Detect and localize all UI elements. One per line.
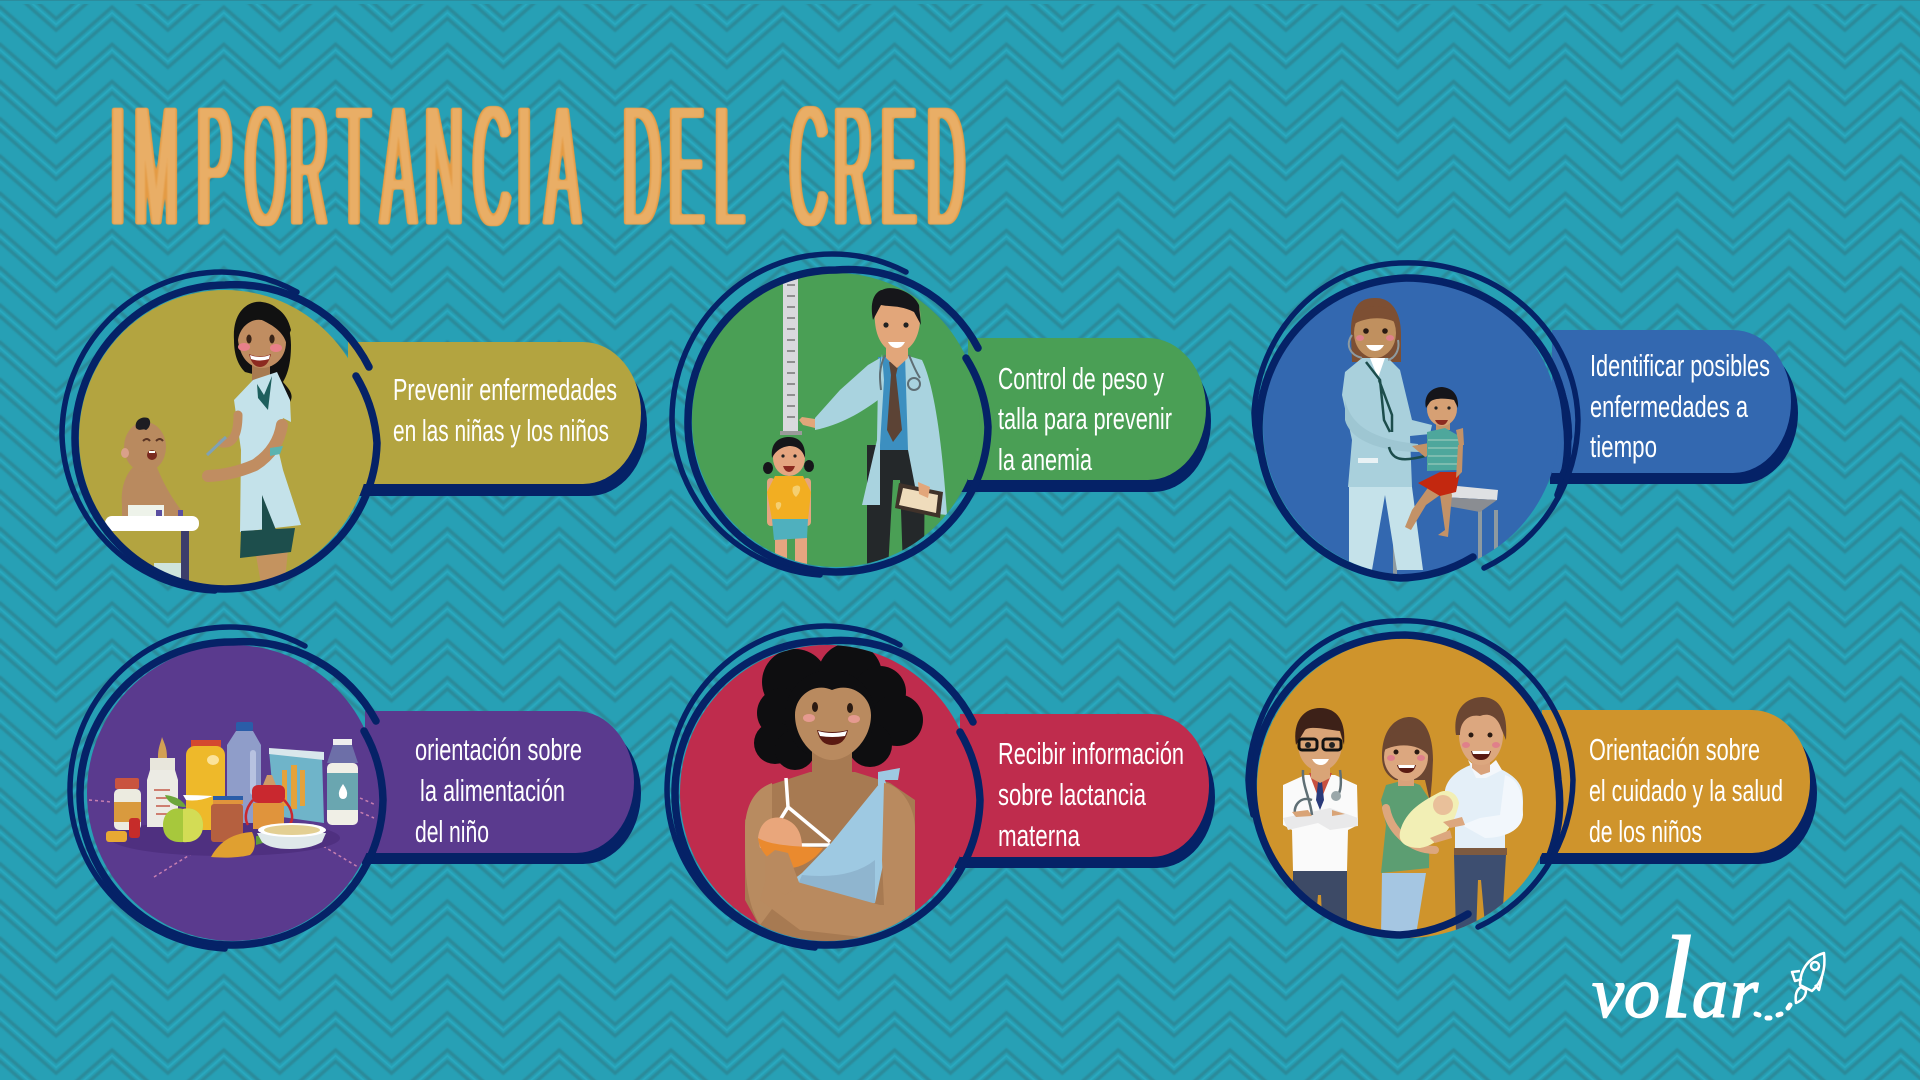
logo wordmark: a [1692, 953, 1728, 1033]
pill shadow [1540, 722, 1817, 864]
panel: orientación sobre el cuidado [1248, 621, 1817, 940]
ring strokes [62, 272, 377, 591]
dotted trail [1756, 1005, 1790, 1018]
illustration: doctor and family with newborn [1283, 697, 1523, 940]
label text: Control de peso y [998, 361, 1164, 396]
illustration: nurse vaccinating baby [105, 302, 301, 590]
icon: rocket [1792, 953, 1824, 1003]
label text: Orientación sobre [1589, 732, 1760, 767]
label text: orientación sobre [415, 732, 582, 767]
ring strokes [667, 626, 980, 948]
label text: la alimentación [420, 773, 565, 808]
pill shadow [955, 726, 1215, 868]
label text: en las niñas y los niños [393, 413, 609, 448]
pill [1542, 710, 1810, 853]
circle background [1257, 638, 1557, 938]
ring strokes [1254, 263, 1578, 578]
label text: materna [998, 818, 1081, 853]
panel: orientación sobre la alimentación [70, 627, 641, 949]
circle background [87, 645, 379, 941]
pill shadow [362, 722, 641, 864]
panel: recibir información sobre lactancia [667, 626, 1215, 948]
pill [365, 711, 634, 853]
label text: Recibir información [998, 736, 1184, 771]
logo wordmark: r [1730, 953, 1759, 1033]
panel: identificar posibles enfermedades [1254, 263, 1798, 578]
ring strokes [1248, 621, 1573, 935]
label text: la anemia [998, 442, 1093, 477]
pill [1552, 330, 1791, 473]
pill shadow [1550, 342, 1798, 484]
pill shadow [960, 350, 1211, 492]
circle background [1263, 279, 1559, 575]
label text: sobre lactancia [998, 777, 1147, 812]
label text: del niño [415, 814, 489, 849]
logo wordmark: l [1660, 912, 1693, 1043]
label text: enfermedades a [1590, 389, 1749, 424]
panel: prevenir enfermedades [62, 272, 647, 591]
logo wordmark: o [1624, 953, 1660, 1033]
label text: Prevenir enfermedades [393, 372, 617, 407]
ring strokes [672, 254, 988, 575]
pill [348, 342, 641, 484]
illustration: nurse examining boy [1342, 298, 1498, 575]
illustration: baby food products [89, 722, 376, 877]
circle background [79, 290, 371, 586]
label text: de los niños [1589, 814, 1702, 849]
label text: talla para prevenir [998, 401, 1172, 436]
panel: control de peso y talla [672, 254, 1211, 575]
label text: Identificar posibles [1590, 348, 1770, 383]
illustration: doctor measuring girl [763, 270, 947, 570]
pill [960, 714, 1209, 857]
logo: volar with rocket [1592, 912, 1824, 1043]
label text: el cuidado y la salud [1589, 773, 1783, 808]
pill [968, 338, 1206, 480]
pill shadow [350, 354, 647, 496]
ring strokes [70, 627, 383, 949]
illustration: mother breastfeeding [745, 643, 923, 945]
circle background [692, 273, 980, 567]
title: IMPORTANCIA DEL CRED [110, 70, 965, 264]
label text: tiempo [1590, 429, 1657, 464]
circle background [680, 645, 974, 941]
logo wordmark: v [1592, 953, 1624, 1033]
